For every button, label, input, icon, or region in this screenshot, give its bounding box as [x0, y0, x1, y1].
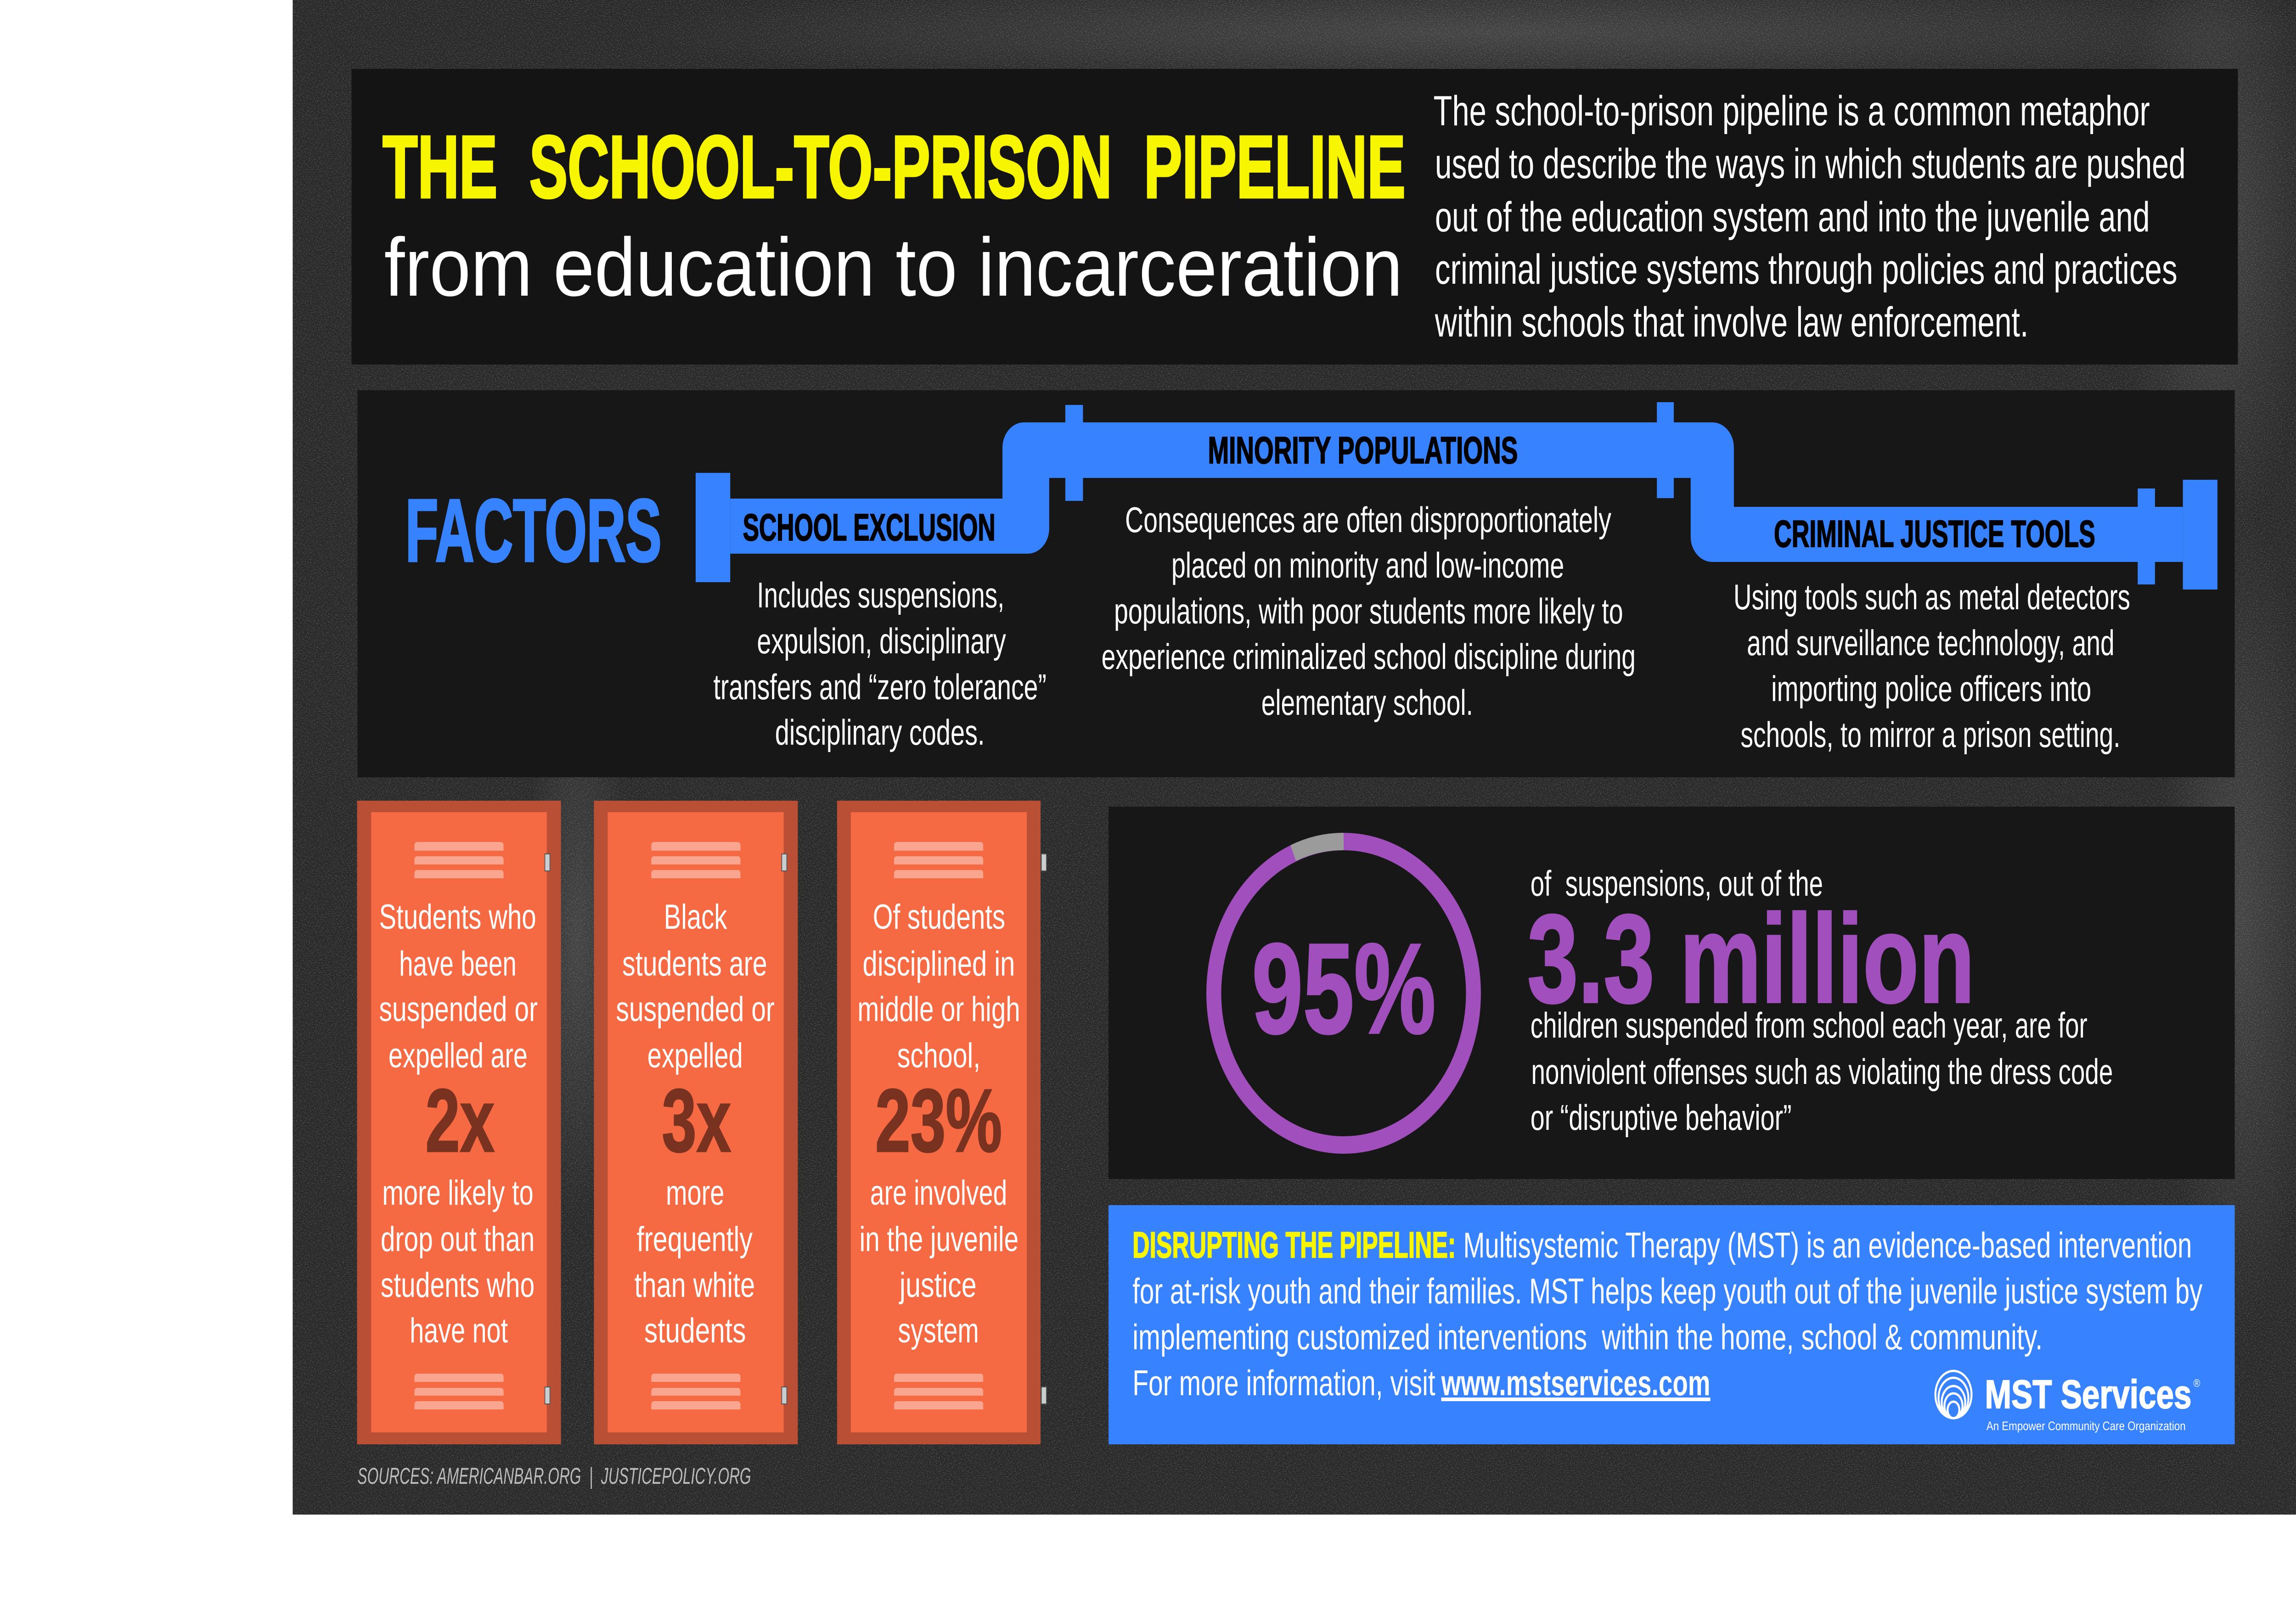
text: nonviolent offenses: children suspended from school each year, are for: [1531, 1005, 2088, 1045]
text: locker one statement: expelled are: [388, 1036, 528, 1075]
icon: bottom vents: [651, 1374, 740, 1409]
text block: minority populations: [1102, 500, 1636, 723]
text: locker two statement: than white: [635, 1265, 755, 1304]
text block: criminal justice tools: and surveillance technology, and: [1747, 623, 2115, 663]
text: locker three statement: disciplined in: [863, 944, 1015, 983]
registered mark: ®: [2194, 1377, 2200, 1389]
heading: main title: THE SCHOOL-TO-PRISON PIPELINE: [383, 118, 1406, 217]
text: locker three statement: middle or high: [857, 989, 1020, 1028]
text block: school exclusion: transfers and “zero tolerance”: [713, 667, 1047, 707]
text block: intro description: out of the education system and into the juvenile and: [1435, 194, 2150, 241]
locker: 23% in juvenile justice: [837, 801, 1047, 1444]
text block: MST description: For more information, visit: [1132, 1363, 1435, 1403]
panel: title: [352, 69, 2238, 365]
text block: school exclusion: [713, 575, 1047, 752]
text block: school exclusion: Includes suspensions,: [757, 575, 1004, 615]
source note: SOURCES: AMERICANBAR.ORG | JUSTICEPOLICY.ORG: [357, 1463, 751, 1489]
text: locker two statement: suspended or: [616, 989, 775, 1028]
text block: intro description: criminal justice systems through policies and practices: [1435, 246, 2178, 293]
text: locker three statement: are involved: [870, 1173, 1007, 1212]
text block: MST description: [1132, 1225, 2203, 1403]
text: nonviolent offenses: [1531, 1005, 2113, 1138]
text block: criminal justice tools: Using tools such as metal detectors: [1733, 577, 2130, 617]
text: locker two statement: expelled: [647, 1036, 743, 1075]
locker: 3x more frequently: [594, 801, 798, 1444]
text: locker two statement: frequently: [637, 1219, 753, 1258]
icon: nested arcs: [1936, 1371, 1971, 1418]
text: locker one statement: [379, 897, 538, 1350]
text: locker three statement: Of students: [873, 897, 1005, 936]
icon: top vents: [651, 842, 740, 878]
text: locker one statement: have not: [410, 1311, 508, 1350]
text: locker three statement: justice: [899, 1265, 977, 1304]
text: locker two statement: 3x: [662, 1071, 731, 1171]
text block: minority populations: experience criminalized school discipline during: [1102, 637, 1636, 677]
text block: criminal justice tools: importing police officers into: [1771, 669, 2091, 709]
text block: criminal justice tools: [1733, 577, 2130, 755]
text block: MST description: implementing customized interventions within the home, school & community.: [1132, 1317, 2043, 1357]
label: school exclusion: SCHOOL EXCLUSION: [743, 506, 996, 549]
icon: top vents: [894, 842, 983, 878]
text block: intro description: The school-to-prison pipeline is a common metaphor: [1433, 88, 2150, 135]
text block: school exclusion: disciplinary codes.: [775, 713, 985, 752]
text block: criminal justice tools: schools, to mirror a prison setting.: [1740, 715, 2121, 755]
text: locker two statement: students: [644, 1311, 746, 1350]
text: locker one statement: suspended or: [379, 989, 538, 1028]
text block: minority populations: elementary school.: [1261, 683, 1473, 723]
logo: MST Services: [1936, 1371, 2200, 1433]
logo wordmark: MST Services: [1985, 1373, 2191, 1417]
text: locker three statement: in the juvenile: [860, 1219, 1019, 1258]
icon: bottom vents: [894, 1374, 983, 1409]
heading: disrupting the pipeline: DISRUPTING THE PIPELINE:: [1132, 1224, 1456, 1265]
text: locker two statement: more: [666, 1173, 724, 1212]
logo tagline: An Empower Community Care Organization: [1986, 1419, 2186, 1433]
text: locker three statement: [857, 897, 1020, 1350]
panel: suspension statistic: [1109, 807, 2235, 1179]
heading: factors: FACTORS: [405, 481, 662, 580]
text block: intro description: within schools that involve law enforcement.: [1435, 299, 2028, 346]
text: locker two statement: Black: [664, 897, 727, 936]
icon: hinges: [545, 854, 550, 1404]
text: nonviolent offenses: or “disruptive behavior”: [1531, 1098, 1792, 1138]
pipeline graphic: [696, 402, 2217, 589]
text: locker one statement: have been: [399, 944, 517, 983]
text block: school exclusion: expulsion, disciplinary: [757, 621, 1006, 661]
text: locker three statement: 23%: [875, 1071, 1002, 1171]
label: minority populations: MINORITY POPULATIONS: [1208, 429, 1518, 472]
text: locker three statement: school,: [897, 1036, 980, 1075]
text block: minority populations: populations, with poor students more likely to: [1114, 591, 1623, 631]
icon: top vents: [414, 842, 504, 878]
text: nonviolent offenses: nonviolent offenses such as violating the dress code: [1531, 1052, 2113, 1092]
panel: factors: [357, 390, 2235, 777]
text: locker two statement: students are: [622, 944, 767, 983]
locker: 2x more likely to drop out: [357, 801, 561, 1444]
text block: minority populations: placed on minority and low-income: [1171, 545, 1564, 585]
big number: 3.3 million: 3.3 million: [1527, 889, 1975, 1029]
text: locker three statement: system: [898, 1311, 979, 1350]
text: locker one statement: students who: [381, 1265, 535, 1304]
big number: 95%: 95%: [1252, 917, 1436, 1061]
label: criminal justice tools: CRIMINAL JUSTICE TOOLS: [1774, 513, 2095, 555]
text block: minority populations: Consequences are often disproportionately: [1125, 500, 1612, 540]
panel: disrupting the pipeline: [1109, 1205, 2235, 1444]
text: locker one statement: Students who: [379, 897, 536, 936]
icon: hinges: [782, 854, 787, 1404]
text: locker one statement: drop out than: [381, 1219, 535, 1258]
subtitle: from education to incarceration: [384, 221, 1403, 314]
link: website: www.mstservices.com: [1441, 1363, 1711, 1403]
text: locker one statement: more likely to: [382, 1173, 534, 1212]
text: locker one statement: 2x: [425, 1071, 495, 1171]
text: of suspensions: of suspensions, out of the: [1531, 864, 1823, 904]
text: locker two statement: [616, 897, 775, 1350]
icon: hinges: [1041, 854, 1047, 1404]
chart: 95 percent donut: [1214, 833, 1474, 1145]
icon: bottom vents: [414, 1374, 504, 1409]
text block: intro description: [1433, 88, 2186, 346]
